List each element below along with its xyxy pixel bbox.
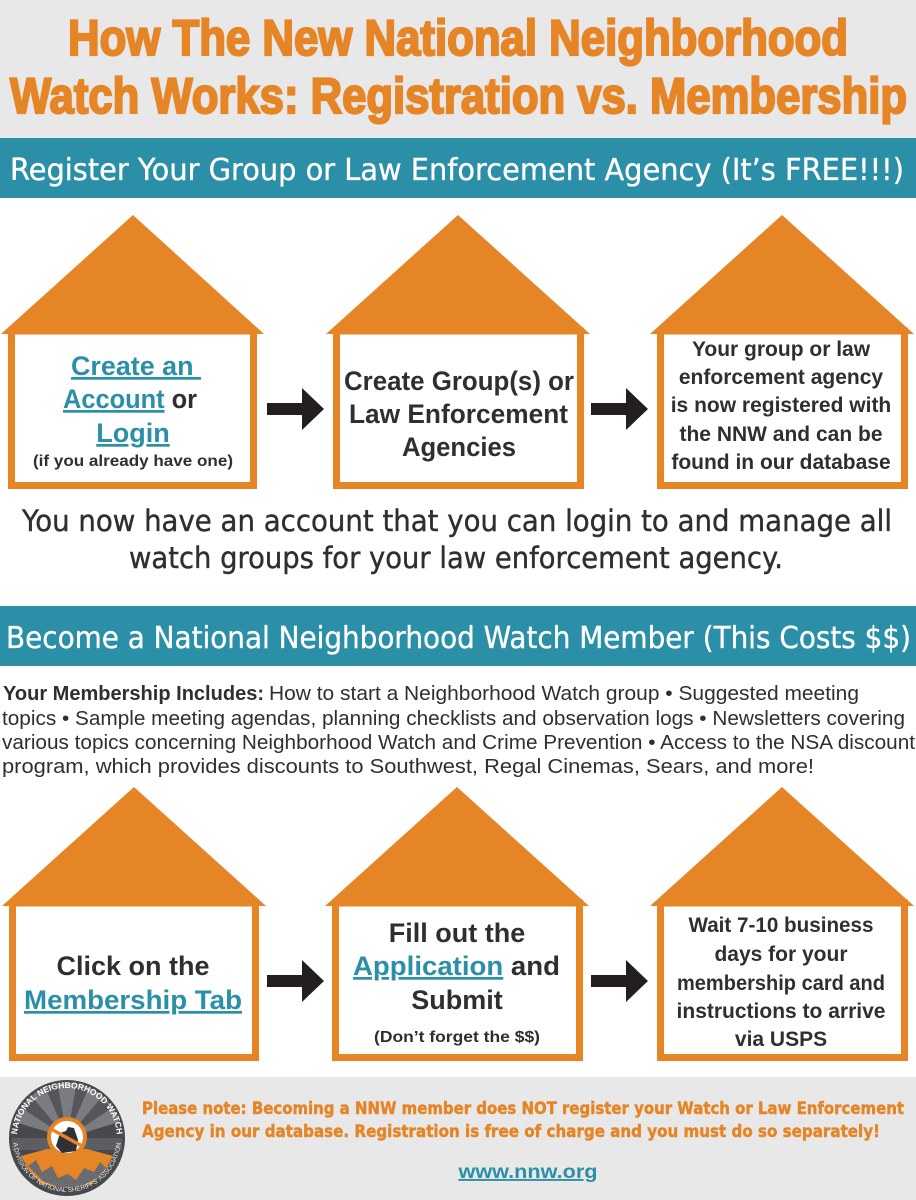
arrow bbox=[267, 960, 324, 1002]
logo bbox=[9, 1080, 125, 1196]
membership details: Your Membership Includes: bbox=[3, 683, 264, 705]
note text bbox=[142, 1099, 904, 1142]
account message: You now have an account that you can login to and manage all bbox=[21, 504, 892, 538]
house: registered: enforcement agency bbox=[679, 366, 883, 389]
membership details: How to start a Neighborhood Watch group • Suggested meeting bbox=[269, 683, 859, 705]
section header: membership bbox=[0, 606, 916, 666]
website link: www.nnw.org bbox=[457, 1162, 598, 1183]
membership details: topics • Sample meeting agendas, planning checklists and observation logs • Newsletters covering bbox=[2, 708, 905, 730]
house: application: Submit bbox=[411, 985, 503, 1015]
membership details: various topics concerning Neighborhood Watch and Crime Prevention • Access to the NSA discount bbox=[2, 732, 915, 754]
section header: register bbox=[0, 138, 916, 198]
house: create an account: Create an bbox=[71, 351, 201, 381]
house: create an account: (if you already have one) bbox=[33, 453, 233, 470]
house: wait bbox=[650, 787, 914, 1058]
house: create groups: Agencies bbox=[402, 432, 516, 462]
house: registered: is now registered with bbox=[671, 394, 891, 417]
account message bbox=[21, 504, 892, 575]
section header: register: Register Your Group or Law Enforcement Agency (It’s FREE!!!) bbox=[10, 153, 904, 188]
house: application bbox=[325, 787, 589, 1058]
house: membership tab: Membership Tab bbox=[24, 985, 242, 1015]
arrow bbox=[591, 960, 648, 1002]
account message: watch groups for your law enforcement agency. bbox=[129, 541, 783, 575]
house: membership tab bbox=[2, 787, 266, 1058]
house: wait: days for your bbox=[714, 943, 848, 966]
membership details bbox=[2, 683, 915, 778]
logo: NATIONAL NEIGHBORHOOD WATCH bbox=[11, 1082, 123, 1134]
house: application: (Don’t forget the $$) bbox=[374, 1029, 540, 1046]
house: create groups bbox=[326, 215, 590, 486]
title band bbox=[0, 0, 916, 138]
house: membership tab: Click on the bbox=[56, 951, 210, 981]
house: wait: via USPS bbox=[735, 1028, 827, 1051]
house: create an account bbox=[1, 215, 264, 486]
house: create groups: Create Group(s) or bbox=[344, 366, 574, 396]
membership details: program, which provides discounts to Southwest, Regal Cinemas, Sears, and more! bbox=[2, 756, 814, 778]
footer band bbox=[0, 1077, 916, 1200]
house: create an account: Login bbox=[96, 418, 170, 448]
logo: A DIVISION OF NATIONAL SHERIFFS' ASSOCIATION bbox=[13, 1142, 121, 1192]
house: create groups: Law Enforcement bbox=[349, 399, 568, 429]
arrow bbox=[591, 388, 648, 430]
house: create an account: Account or bbox=[63, 384, 197, 414]
house: application: Fill out the bbox=[389, 918, 525, 948]
house: wait: instructions to arrive bbox=[677, 1000, 885, 1023]
arrow bbox=[267, 388, 324, 430]
house: registered: found in our database bbox=[671, 451, 891, 474]
house: registered bbox=[650, 215, 914, 486]
house: registered: the NNW and can be bbox=[679, 423, 883, 446]
house: application: Application and bbox=[353, 951, 560, 981]
house: wait: Wait 7-10 business bbox=[688, 914, 874, 937]
house: wait: membership card and bbox=[677, 972, 885, 995]
house: registered: Your group or law bbox=[692, 338, 871, 361]
